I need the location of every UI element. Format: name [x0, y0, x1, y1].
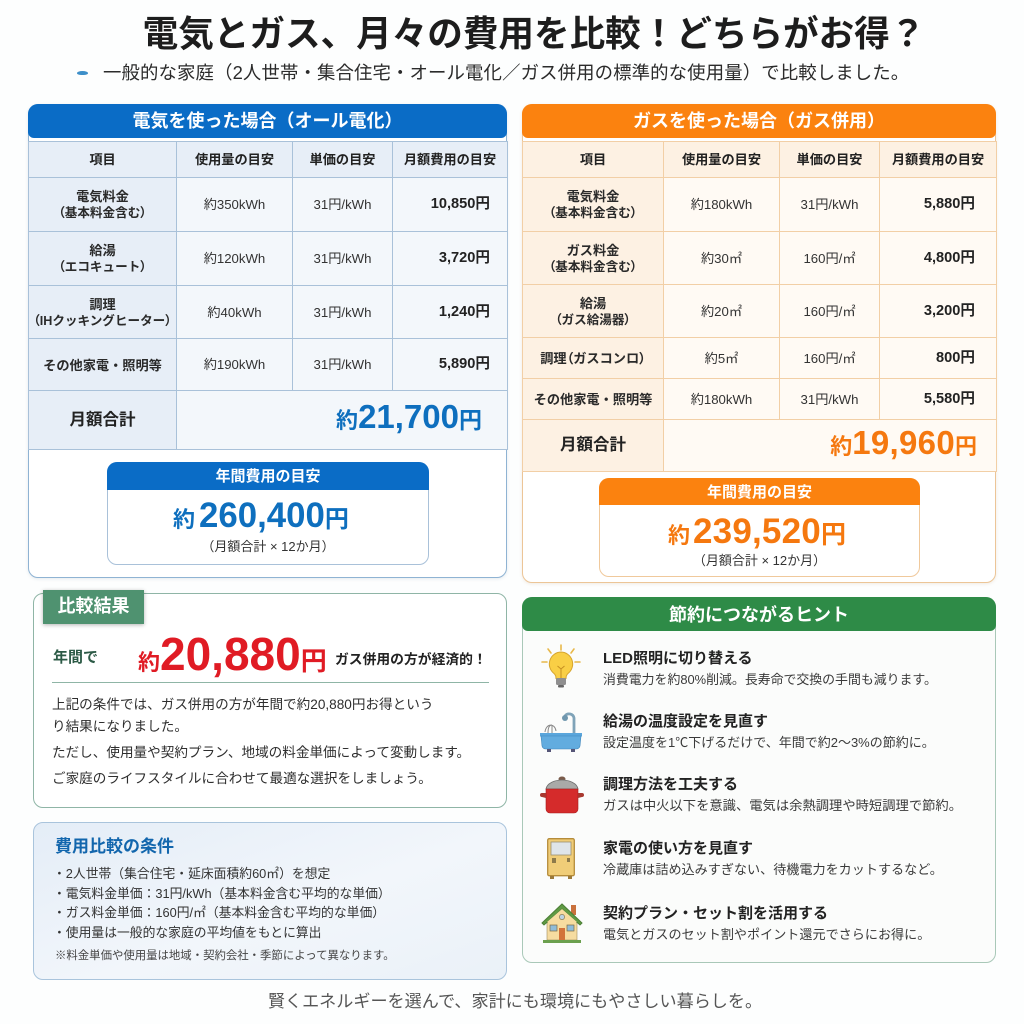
row: electricity: （基本料金含む） — [549, 206, 637, 220]
table header row: 使用量の目安 — [682, 152, 761, 167]
row: gas: ガス料金 — [567, 242, 619, 258]
annual cost box: electric — [107, 462, 429, 565]
tip: LED — [541, 644, 937, 688]
row: electricity: 電気料金 — [567, 189, 619, 204]
row: hot water — [523, 285, 996, 337]
conditions list: ・電気料金単価：31円/kWh（基本料金含む平均的な単価） — [53, 886, 391, 901]
result explanation: り結果になりました。 — [52, 719, 188, 734]
icon: refrigerator — [547, 838, 575, 879]
electric panel header — [28, 104, 507, 138]
row: other appliances: その他家電・照明等 — [43, 358, 162, 372]
row: electricity — [29, 178, 507, 231]
conditions list: ・ガス料金単価：160円/㎡（基本料金含む平均的な単価） — [53, 905, 385, 920]
row: monthly total — [523, 420, 996, 471]
tip description: 電気とガスのセット割やポイント還元でさらにお得に。 — [603, 927, 930, 942]
annual heading — [599, 478, 920, 505]
row: hot water: 3,720円 — [439, 250, 490, 266]
annual formula: （月額合計 × 12か月） — [693, 553, 826, 568]
row: other appliances: 約180kWh — [691, 392, 752, 406]
row: cooking: 約5㎡ — [705, 350, 738, 366]
tip: contract plan — [541, 903, 930, 943]
table header row: 使用量の目安 — [195, 152, 274, 167]
row: cooking: 31円/kWh — [314, 304, 371, 320]
result explanation: ただし、使用量や契約プラン、地域の料金単価によって変動します。 — [52, 745, 470, 760]
conditions list — [53, 866, 391, 940]
row: hot water: 160円/㎡ — [803, 304, 856, 318]
row: cooking: （IHクッキングヒーター） — [33, 314, 172, 328]
table header row: 月額費用の目安 — [892, 152, 984, 167]
row: cooking: 調理 — [89, 296, 116, 312]
panel: saving tips — [522, 597, 996, 963]
row: gas — [523, 232, 996, 284]
row: electricity: 31円/kWh — [314, 197, 371, 212]
row: monthly total: 月額合計 — [70, 410, 136, 428]
icon: red pot — [540, 776, 584, 814]
annual heading: 年間費用の目安 — [707, 484, 812, 501]
footer message: 賢くエネルギーを選んで、家計にも環境にもやさしい暮らしを。 — [268, 992, 762, 1011]
table header row: 単価の目安 — [797, 152, 862, 167]
result amount: 約20,880円 — [138, 628, 327, 680]
annual formula: （月額合計 × 12か月） — [201, 539, 335, 554]
panel: electric — [28, 104, 507, 578]
table header row: 月額費用の目安 — [404, 152, 496, 167]
row: gas: （基本料金含む） — [549, 260, 637, 274]
annual heading: 年間費用の目安 — [215, 468, 320, 485]
table header row: 項目 — [580, 152, 606, 167]
row: hot water — [29, 232, 507, 285]
table header row — [29, 142, 507, 449]
subtitle: 一般的な家庭（2人世帯・集合住宅・オール電化／ガス併用の標準的な使用量）で比較しました。 — [103, 62, 909, 83]
row: gas: 160円/㎡ — [803, 250, 856, 266]
annual amount: 約239,520円 — [668, 512, 846, 551]
tip title: LED照明に切り替える — [603, 650, 753, 667]
result divider — [52, 682, 489, 683]
table header row: 項目 — [89, 152, 116, 167]
row: other appliances: 31円/kWh — [314, 357, 371, 372]
row: other appliances: 5,890円 — [439, 356, 490, 372]
row: cooking: 1,240円 — [439, 304, 490, 320]
row: electricity: （基本料金含む） — [58, 206, 147, 220]
result explanation: 上記の条件では、ガス併用の方が年間で約20,880円お得という — [52, 697, 433, 712]
row: monthly total — [29, 391, 507, 449]
tip description: 冷蔵庫は詰め込みすぎない、待機電力をカットするなど。 — [603, 862, 943, 877]
row: electricity: 電気料金 — [76, 189, 129, 204]
tip description: ガスは中火以下を意識、電気は余熱調理や時短調理で節約。 — [603, 798, 962, 813]
tip title: 家電の使い方を見直す — [603, 840, 753, 857]
row: monthly total: 月額合計 — [560, 436, 626, 454]
row: cooking: 約40kWh — [207, 304, 262, 320]
row: cooking: 800円 — [936, 350, 975, 366]
row: monthly total: 約21,700円 — [336, 398, 482, 435]
row: cooking: 調理（ガスコンロ） — [540, 351, 646, 366]
row: monthly total: 約19,960円 — [830, 424, 977, 460]
row: hot water: 給湯 — [580, 296, 606, 310]
tips header: 節約につながるヒント — [669, 605, 849, 625]
row: cooking: 160円/㎡ — [803, 350, 856, 366]
icon: light bulb — [541, 644, 581, 688]
row: hot water: 約120kWh — [204, 251, 265, 266]
tip description: 消費電力を約80%削減。長寿命で交換の手間も減ります。 — [603, 672, 937, 687]
electric cost table — [28, 141, 508, 450]
annual cost box: gas — [599, 478, 920, 577]
result verdict: ガス併用の方が経済的！ — [335, 652, 487, 667]
tip: appliances — [547, 838, 943, 879]
conditions note: ※料金単価や使用量は地域・契約会社・季節によって異なります。 — [55, 950, 395, 962]
conditions heading: 費用比較の条件 — [55, 837, 174, 856]
row: hot water: 給湯 — [89, 243, 116, 258]
tip title: 契約プラン・セット割を活用する — [603, 905, 828, 922]
row: hot water: 3,200円 — [924, 302, 975, 318]
tip title: 給湯の温度設定を見直す — [603, 713, 768, 730]
electric panel header: 電気を使った場合（オール電化） — [132, 111, 402, 131]
row: other appliances: 約190kWh — [204, 357, 265, 372]
table header row: 単価の目安 — [310, 152, 375, 167]
row: gas: 4,800円 — [924, 250, 975, 266]
icon: subtitle bullet — [77, 71, 88, 75]
row: other appliances — [29, 339, 507, 390]
panel: gas — [522, 104, 996, 583]
row: cooking — [523, 338, 996, 378]
row: electricity: 5,880円 — [924, 196, 975, 212]
tip description: 設定温度を1℃下げるだけで、年間で約2～3%の節約に。 — [603, 735, 935, 750]
panel: conditions — [33, 822, 507, 980]
icon: bathtub — [540, 712, 582, 752]
row: hot water: （エコキュート） — [58, 260, 147, 274]
row: gas: 約30㎡ — [701, 250, 742, 266]
row: hot water: 31円/kWh — [314, 251, 371, 266]
title: 電気とガス、月々の費用を比較！どちらがお得？ — [143, 14, 925, 54]
row: electricity: 約180kWh — [691, 197, 752, 212]
label: per year: 年間で — [53, 649, 98, 666]
row: electricity: 10,850円 — [431, 196, 490, 212]
table header row — [523, 142, 996, 471]
result explanation: ご家庭のライフスタイルに合わせて最適な選択をしましょう。 — [52, 771, 432, 786]
result tag — [43, 590, 144, 624]
row: other appliances: 5,580円 — [924, 390, 975, 406]
gas panel header: ガスを使った場合（ガス併用） — [633, 111, 885, 131]
conditions list: ・使用量は一般的な家庭の平均値をもとに算出 — [53, 925, 321, 940]
row: electricity — [523, 178, 996, 231]
annual heading — [107, 462, 429, 490]
tips header — [522, 597, 996, 631]
row: other appliances — [523, 379, 996, 419]
tip: cooking — [540, 776, 962, 814]
gas cost table — [522, 141, 997, 472]
row: hot water: （ガス給湯器） — [555, 312, 631, 326]
row: cooking — [29, 286, 507, 338]
row: electricity: 31円/kWh — [801, 197, 858, 212]
row: other appliances: その他家電・照明等 — [534, 392, 652, 407]
icon: house — [541, 903, 583, 943]
row: electricity: 約350kWh — [204, 197, 265, 212]
result explanation — [52, 697, 470, 786]
conditions list: ・2人世帯（集合住宅・延床面積約60㎡）を想定 — [53, 866, 330, 881]
panel: comparison result — [33, 593, 507, 808]
annual amount: 約260,400円 — [173, 496, 349, 535]
tip title: 調理方法を工夫する — [603, 776, 738, 793]
row: other appliances: 31円/kWh — [801, 392, 858, 406]
row: hot water: 約20㎡ — [701, 304, 742, 318]
result tag: 比較結果 — [58, 596, 130, 616]
tip: water heating — [540, 712, 935, 752]
gas panel header — [522, 104, 996, 138]
